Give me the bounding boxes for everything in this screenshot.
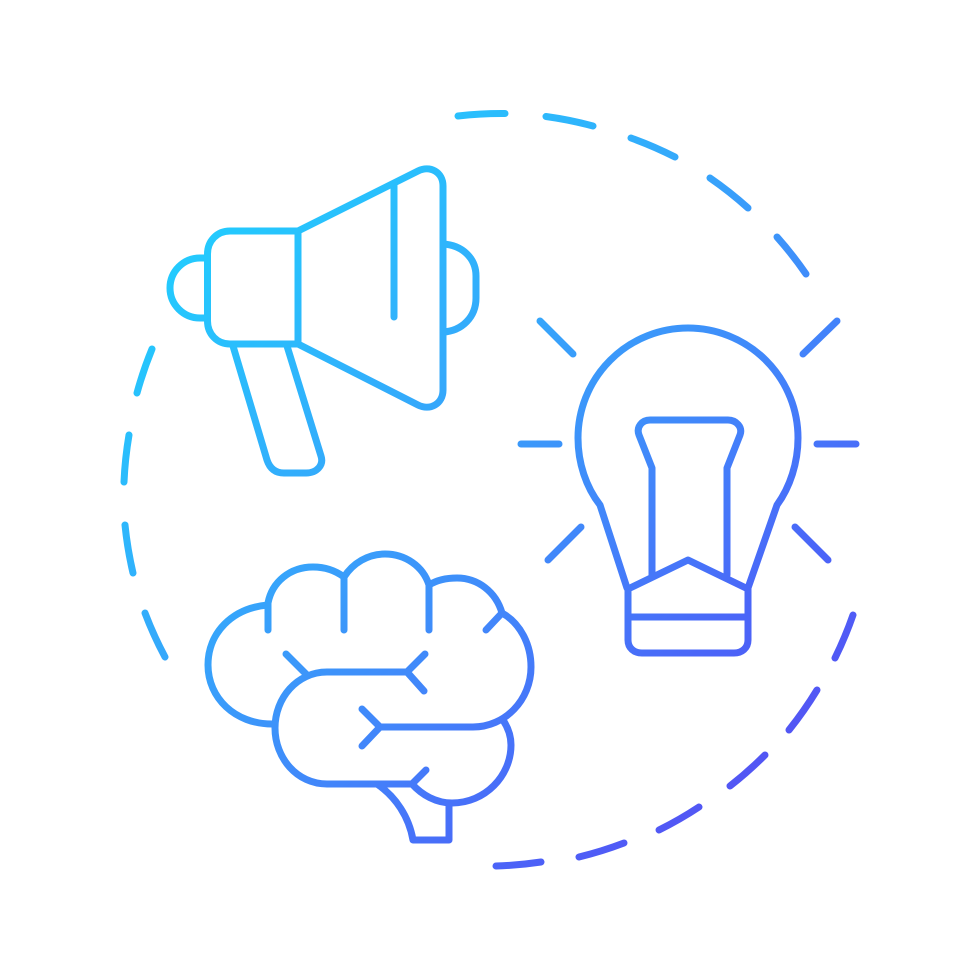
icon: megaphone bbox=[170, 169, 476, 473]
icon: light bulb bbox=[521, 321, 856, 653]
icon: brain bbox=[208, 554, 531, 840]
dashed circle bbox=[124, 113, 853, 866]
light rays bbox=[521, 321, 856, 560]
